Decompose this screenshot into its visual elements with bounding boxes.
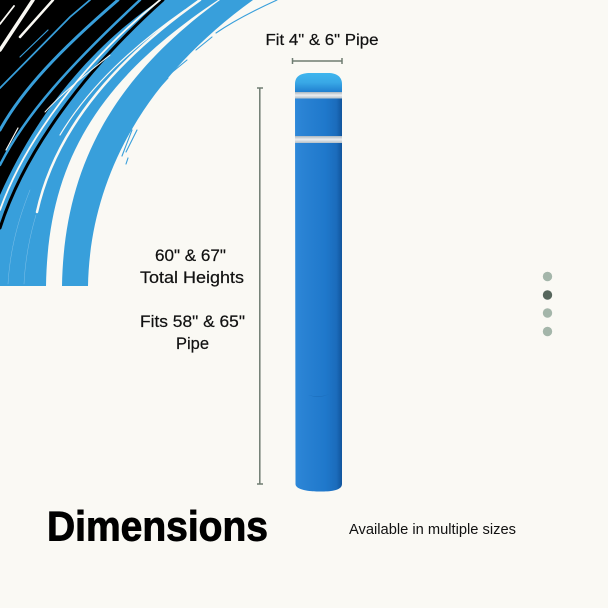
white streaks in black xyxy=(0,0,33,50)
title: Dimensions xyxy=(47,502,268,550)
pole body xyxy=(295,92,342,492)
label: fits pipe: Pipe xyxy=(176,335,209,353)
blue bollard cover xyxy=(295,73,342,492)
white stripe above black streak xyxy=(0,0,160,210)
wispy outer stroke xyxy=(122,0,277,164)
pipe width dimension line xyxy=(292,58,342,64)
label: total heights: 60" & 67" xyxy=(155,247,226,265)
pagination dots xyxy=(543,272,552,336)
label: total heights: Total Heights xyxy=(140,269,244,287)
wide blue stroke area xyxy=(0,0,218,286)
faint lines in blue xyxy=(8,190,30,284)
brush stroke arcs decoration xyxy=(0,0,277,286)
label: fits pipe: Fits 58" & 65" xyxy=(140,313,245,331)
label: total heights xyxy=(140,247,244,287)
label: pipe fit: Fit 4" & 6" Pipe xyxy=(266,32,378,49)
label: fits pipe xyxy=(140,313,245,353)
lower reflective band xyxy=(295,136,342,143)
main white stripe xyxy=(37,0,200,212)
outer blue band xyxy=(62,0,253,286)
subtitle: Available in multiple sizes xyxy=(349,522,516,538)
upper reflective band xyxy=(295,92,342,98)
crease mark xyxy=(308,394,329,397)
height dimension line xyxy=(257,88,263,484)
black lower streak xyxy=(0,0,163,228)
blue streaks in black xyxy=(0,0,90,88)
pole cap xyxy=(295,73,342,92)
black brush mass xyxy=(0,0,160,195)
